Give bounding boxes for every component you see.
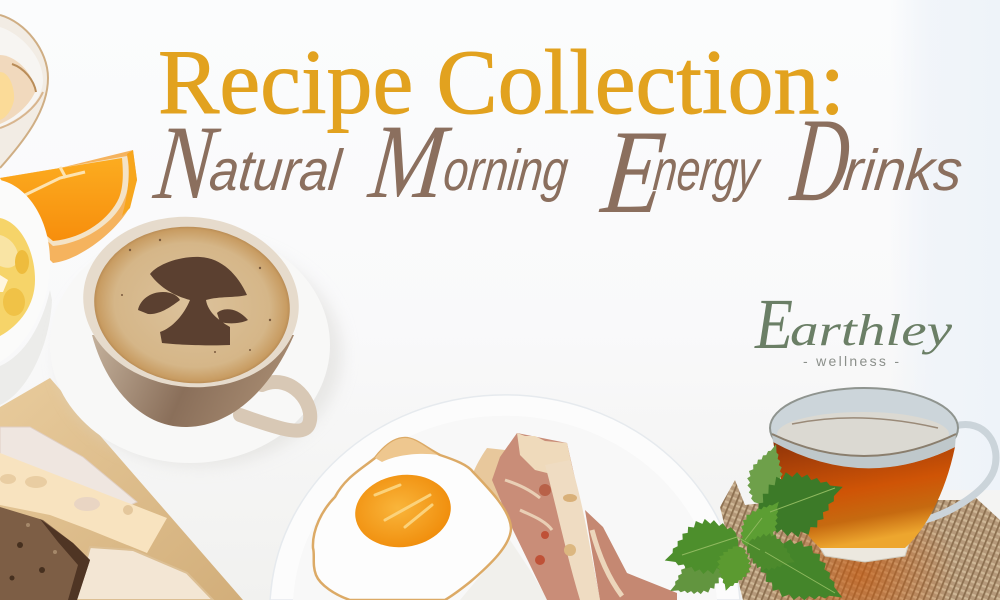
photo: orange slice bbox=[0, 150, 137, 263]
logo: Earthley wellness: arthley bbox=[790, 306, 953, 355]
subtitle: Natural Morning Energy Drinks: rinks bbox=[841, 138, 965, 203]
photo: front bacon strip bbox=[492, 433, 600, 600]
subtitle: Natural Morning Energy Drinks: E bbox=[595, 106, 671, 239]
photo: cutting board bbox=[0, 378, 243, 600]
glass handle bbox=[925, 425, 996, 520]
photo: glass bowl at top left bbox=[0, 15, 48, 168]
photo: white saucer bbox=[50, 227, 342, 466]
photo: glass tea cup bbox=[770, 388, 996, 562]
coffee foam bbox=[86, 217, 298, 393]
photo: fried egg bbox=[313, 438, 511, 600]
photo: coffee cup with mushroom latte art bbox=[75, 206, 310, 431]
front glass band bbox=[772, 434, 956, 468]
logo: Earthley wellness: E bbox=[754, 284, 793, 364]
subtitle: Natural Morning Energy Drinks: N bbox=[149, 103, 224, 221]
logo: Earthley wellness bbox=[754, 284, 953, 369]
subtitle: Natural Morning Energy Drinks: D bbox=[785, 94, 856, 227]
cup handle bbox=[240, 382, 310, 431]
photo: cereal bowl at left bbox=[0, 180, 52, 405]
foam specks bbox=[121, 239, 271, 353]
glass rim and upper bowl bbox=[770, 388, 958, 468]
subtitle: Natural Morning Energy Drinks: M bbox=[363, 102, 456, 220]
photo: second egg white under bacon bbox=[460, 540, 548, 600]
cup rim bbox=[75, 206, 307, 398]
mushroom latte art bbox=[138, 257, 248, 345]
photo: swiss cheese slice bbox=[0, 453, 167, 553]
photo: burlap mat bbox=[720, 480, 1000, 600]
subtitle: Natural Morning Energy Drinks: atural bbox=[207, 138, 358, 203]
photo: white plate bbox=[270, 395, 740, 600]
rim highlight bbox=[772, 434, 956, 456]
subtitle: Natural Morning Energy Drinks: orning bbox=[441, 138, 583, 203]
photo: white bread bbox=[75, 547, 213, 600]
glass base bbox=[815, 540, 910, 562]
photo: back bacon strip bbox=[473, 448, 677, 600]
tea bbox=[773, 440, 955, 548]
egg yolk bbox=[350, 469, 456, 553]
title: Recipe Collection: Recipe Collection: bbox=[158, 31, 845, 133]
inner tea surface bbox=[777, 412, 949, 456]
cup body bbox=[92, 335, 294, 427]
logo: Earthley wellness: - wellness - bbox=[803, 353, 899, 369]
photo: dark rye bread bbox=[0, 507, 90, 600]
subtitle: Natural Morning Energy Drinks: nergy bbox=[651, 138, 773, 203]
photo: nettle leaves bbox=[656, 439, 857, 600]
photo: sliced turkey bbox=[0, 427, 137, 510]
